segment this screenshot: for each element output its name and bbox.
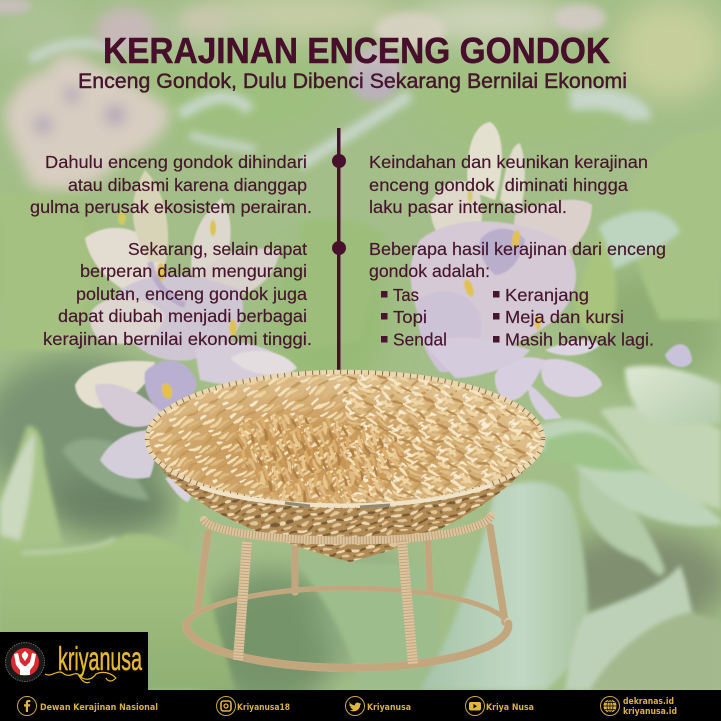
stem — [178, 495, 195, 555]
text block: international market: laku pasar internasional. — [369, 197, 567, 217]
text block: international market: enceng gondok diminati hingga — [369, 175, 628, 195]
stand: front legs — [238, 541, 413, 664]
bottom right leaves — [565, 565, 695, 690]
text block: present: berperan dalam mengurangi — [80, 261, 307, 281]
basket on stand — [130, 360, 560, 668]
bottom right teal leaf — [420, 482, 588, 690]
logo: kriyanusa wordmark: kriyanusa — [58, 640, 142, 677]
text block: present: polutan, enceng gondok juga — [76, 284, 307, 304]
text block: international market — [369, 152, 648, 217]
text block: past: gulma perusak ekosistem perairan. — [30, 197, 312, 217]
text block: product intro: gondok adalah: — [369, 261, 490, 281]
logo: dekranas emblem — [6, 642, 44, 682]
footer: twitter — [346, 696, 411, 716]
footer: youtube: Kriya Nusa — [486, 703, 534, 713]
bowl underside — [158, 465, 525, 562]
footer: facebook — [18, 696, 158, 716]
bowl interior — [149, 374, 541, 504]
logo: flourish — [45, 672, 116, 683]
left spire leaf — [0, 426, 62, 545]
title: KERAJINAN ENCENG GONDOK — [103, 30, 611, 71]
product list: first column: Tas — [393, 285, 419, 305]
product list: first column — [381, 285, 447, 350]
text block: present: kerajinan bernilai ekonomi tinggi. — [43, 329, 312, 349]
subtitle: Enceng Gondok, Dulu Dibenci Sekarang Bernilai Ekonomi — [78, 69, 627, 93]
stand: upper ring — [204, 516, 491, 540]
timeline divider with dots — [332, 128, 346, 374]
product list: second column: Masih banyak lagi. — [505, 330, 654, 350]
text block: international market: Keindahan dan keunikan kerajinan — [369, 152, 648, 172]
footer: twitter: Kriyanusa — [367, 703, 411, 713]
product list: second column: Keranjang — [505, 285, 589, 305]
right stacked leaves — [578, 468, 665, 575]
bottom left large leaf — [0, 534, 235, 690]
product list: first column: Topi — [393, 307, 427, 327]
footer: facebook: Dewan Kerajinan Nasional — [40, 703, 158, 713]
logo panel — [0, 632, 148, 692]
bottom middle leaf — [290, 555, 439, 690]
text block: past: Dahulu enceng gondok dihindari — [45, 152, 307, 172]
footer: websites: dekranas.id — [623, 697, 674, 707]
flower: lower left — [75, 320, 297, 502]
text block: past: atau dibasmi karena dianggap — [68, 175, 307, 195]
footer: websites — [600, 696, 677, 717]
background flowers — [0, 0, 692, 502]
footer: instagram: Kriyanusa18 — [237, 703, 290, 713]
flower: middle left — [85, 170, 280, 361]
bowl rim — [147, 372, 543, 506]
text block: present: dapat diubah menjadi berbagai — [58, 306, 307, 326]
footer: instagram — [216, 696, 290, 716]
text block: past — [30, 152, 312, 217]
small leaf centre left — [62, 439, 150, 500]
product list: second column: Meja dan kursi — [505, 307, 624, 327]
flower: right lower — [425, 337, 692, 420]
product list: first column: Sendal — [393, 330, 447, 350]
flower: top left blurred cluster — [5, 6, 231, 190]
flower: centre right — [411, 122, 592, 372]
text block: present: Sekarang, selain dapat — [128, 239, 307, 259]
text block: product intro — [369, 239, 666, 281]
footer bar — [0, 690, 721, 721]
stand: back legs and lower ring — [187, 527, 508, 668]
text block: present — [43, 239, 312, 349]
text block: product intro: Beberapa hasil kerajinan dari enceng — [369, 239, 666, 259]
leaves — [0, 128, 721, 690]
footer: youtube — [466, 696, 534, 716]
footer: websites: kriyanusa.id — [623, 707, 677, 717]
product list: second column — [493, 285, 654, 350]
flower: top centre — [0, 0, 606, 101]
pale stalk streaks — [30, 43, 640, 165]
